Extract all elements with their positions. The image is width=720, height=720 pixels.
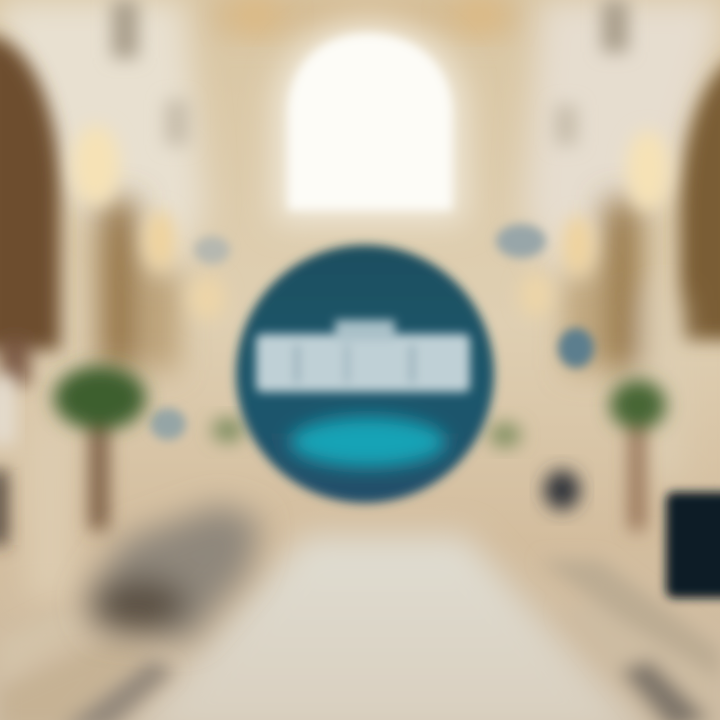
window glow [275, 22, 465, 222]
circular emblem [236, 245, 494, 503]
left dark arch [0, 35, 60, 385]
floor right stripes [540, 560, 720, 720]
left edge figures [0, 375, 15, 545]
floor [125, 535, 650, 720]
small wall emblems [150, 224, 594, 440]
upper side walls [0, 0, 720, 280]
right small dark object [544, 470, 580, 510]
right columns [570, 200, 680, 480]
plant: right [610, 380, 666, 530]
emblem teal band [290, 417, 446, 467]
floor left stripes [0, 610, 175, 720]
emblem white text band [256, 320, 470, 392]
plant: left [54, 366, 146, 530]
right dark cabinet [666, 492, 720, 598]
right dark arch [680, 55, 720, 340]
upper wall details [112, 0, 628, 145]
wall lamps [72, 125, 670, 320]
ceiling lights [231, 0, 504, 31]
left seating [85, 505, 260, 640]
left columns [25, 200, 174, 600]
small plants beside emblem [212, 418, 521, 447]
arched window [288, 34, 452, 210]
emblem disc [236, 245, 494, 503]
